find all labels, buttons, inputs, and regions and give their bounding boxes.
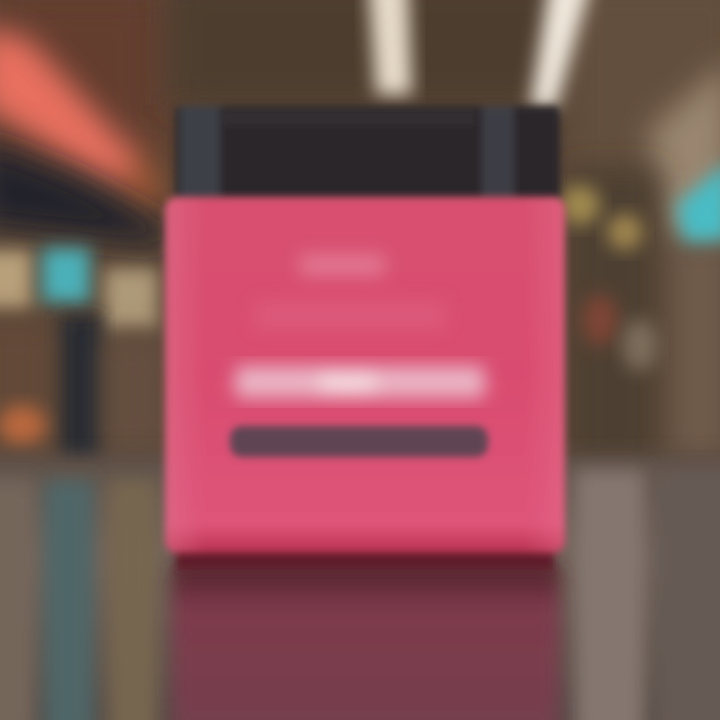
right side: teal sign and yellow lights (560, 160, 720, 371)
jar lid (175, 106, 560, 200)
jar reflection (172, 565, 560, 720)
jar shadow (176, 545, 554, 571)
jar (165, 106, 565, 571)
reflective floor (0, 455, 720, 720)
dark band left (0, 140, 165, 245)
ceiling light left (368, 0, 412, 95)
neon sign glow left (0, 25, 165, 225)
white label band (235, 366, 485, 398)
left shelves: beige and teal lights (0, 248, 165, 465)
background: store interior (0, 0, 720, 490)
faint label marks (255, 255, 445, 328)
jar body (165, 197, 565, 553)
dark label band (230, 426, 488, 457)
ceiling light right (530, 0, 592, 108)
